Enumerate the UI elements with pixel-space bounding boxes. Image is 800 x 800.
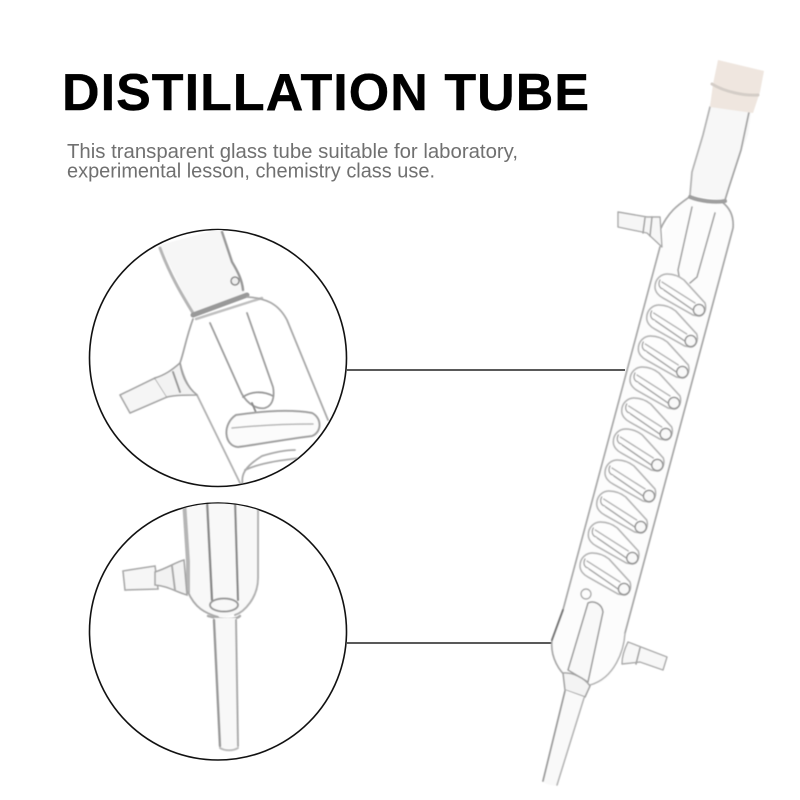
main body outline [552, 198, 733, 686]
condenser coil [580, 274, 706, 595]
lower inner tube [568, 602, 603, 682]
description text: This transparent glass tube suitable for laboratory, [67, 141, 518, 163]
stem [543, 690, 584, 785]
connector line: upper detail [347, 369, 625, 371]
stopper [710, 60, 764, 113]
detail circle: lower joint [90, 500, 346, 760]
description text: experimental lesson, chemistry class use. [67, 160, 435, 182]
upper side arm [618, 212, 662, 247]
connector line: lower detail [347, 642, 552, 644]
detail circle: upper joint [90, 228, 346, 486]
upper inner tube [678, 207, 715, 283]
glass neck [690, 95, 753, 200]
lower side arm [622, 642, 667, 670]
title: DISTILLATION TUBE [62, 64, 589, 122]
distillation tube: full product [543, 60, 764, 785]
description text [67, 141, 518, 182]
lower joint ring [563, 673, 590, 697]
